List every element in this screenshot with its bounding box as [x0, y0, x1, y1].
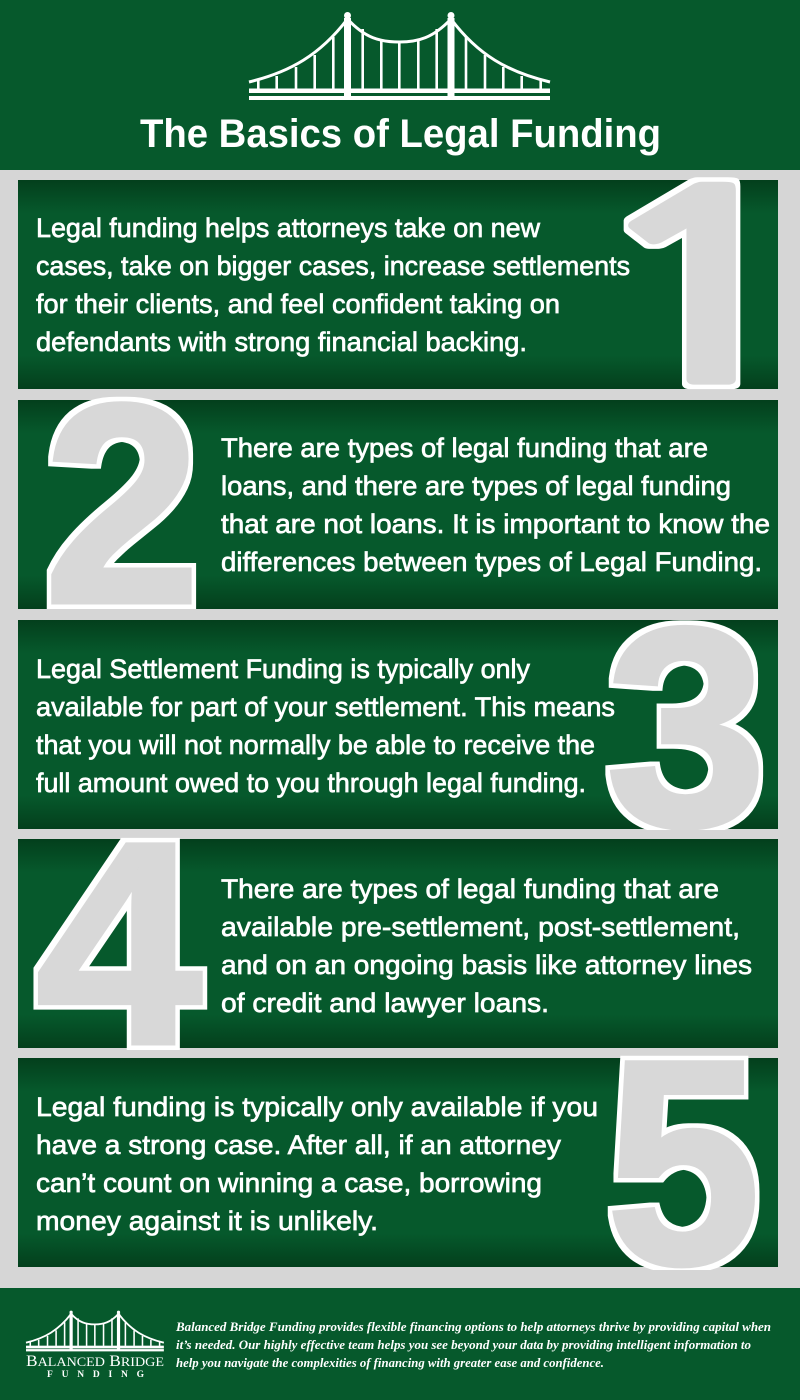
- panel 5 text: money against it is unlikely.: [36, 1206, 378, 1236]
- logo wordmark: BALANCED BRIDGE: [26, 1353, 164, 1370]
- panel 3: [18, 620, 778, 830]
- numeral 2: 2: [44, 345, 200, 662]
- panel 3 text: that you will not normally be able to receive the: [36, 730, 595, 760]
- panel 5 text: [36, 1092, 598, 1236]
- icon: small bridge: [26, 1311, 164, 1351]
- panel 3 text: full amount owed to you through legal funding.: [36, 768, 586, 798]
- panel 2: [18, 345, 778, 662]
- panel 4 text: and on an ongoing basis like attorney lines: [221, 950, 752, 980]
- panel 2 text: [221, 433, 770, 577]
- panel 3 text: Legal Settlement Funding is typically only: [36, 654, 530, 684]
- panel 5 text: Legal funding is typically only available if you: [36, 1092, 598, 1122]
- panel 5 text: have a strong case. After all, if an attorney: [36, 1130, 562, 1160]
- panel 1 text: defendants with strong financial backing.: [36, 327, 527, 357]
- panel 3 text: [36, 654, 615, 798]
- panel 5 text: can’t count on winning a case, borrowing: [36, 1168, 542, 1198]
- panel 4 text: [221, 874, 752, 1018]
- panel 4: [18, 784, 778, 1105]
- icon: suspension bridge: [249, 12, 550, 100]
- footer description: Balanced Bridge Funding provides flexible financing options to help attorneys thrive by providing capital when: [175, 1319, 771, 1334]
- panel 2 text: differences between types of Legal Funding.: [221, 547, 762, 577]
- numeral 4: 4: [36, 784, 204, 1105]
- panel 1 text: cases, take on bigger cases, increase settlements: [36, 251, 630, 281]
- panel 2 text: There are types of legal funding that are: [221, 433, 708, 463]
- panel 1 text: for their clients, and feel confident taking on: [36, 289, 560, 319]
- panel 1 text: Legal funding helps attorneys take on new: [36, 213, 540, 243]
- panel 1 text: [36, 213, 630, 357]
- footer band: [0, 1288, 800, 1400]
- panel 4 text: of credit and lawyer loans.: [221, 988, 549, 1018]
- footer description: help you navigate the complexities of financing with greater ease and confidence.: [176, 1355, 604, 1370]
- panel 3 text: available for part of your settlement. This means: [36, 692, 615, 722]
- panel 2 text: loans, and there are types of legal funding: [221, 471, 731, 501]
- footer logo: [26, 1311, 164, 1380]
- panel 2 text: that are not loans. It is important to know the: [221, 509, 770, 539]
- footer description: it’s needed. Our highly effective team helps you see beyond your data by providing intelligent information to: [176, 1337, 751, 1352]
- header band: [0, 0, 800, 170]
- panel 4 text: available pre-settlement, post-settlement,: [221, 912, 740, 942]
- panel 4 text: There are types of legal funding that are: [221, 874, 719, 904]
- numeral 3: 3: [606, 569, 767, 885]
- logo subline: FUNDING: [47, 1370, 145, 1380]
- numeral 5: 5: [606, 1001, 760, 1326]
- title: The Basics of Legal Funding: [140, 112, 661, 156]
- panel 5: [18, 1056, 778, 1270]
- footer description: [175, 1319, 771, 1370]
- panel 1: [18, 162, 800, 421]
